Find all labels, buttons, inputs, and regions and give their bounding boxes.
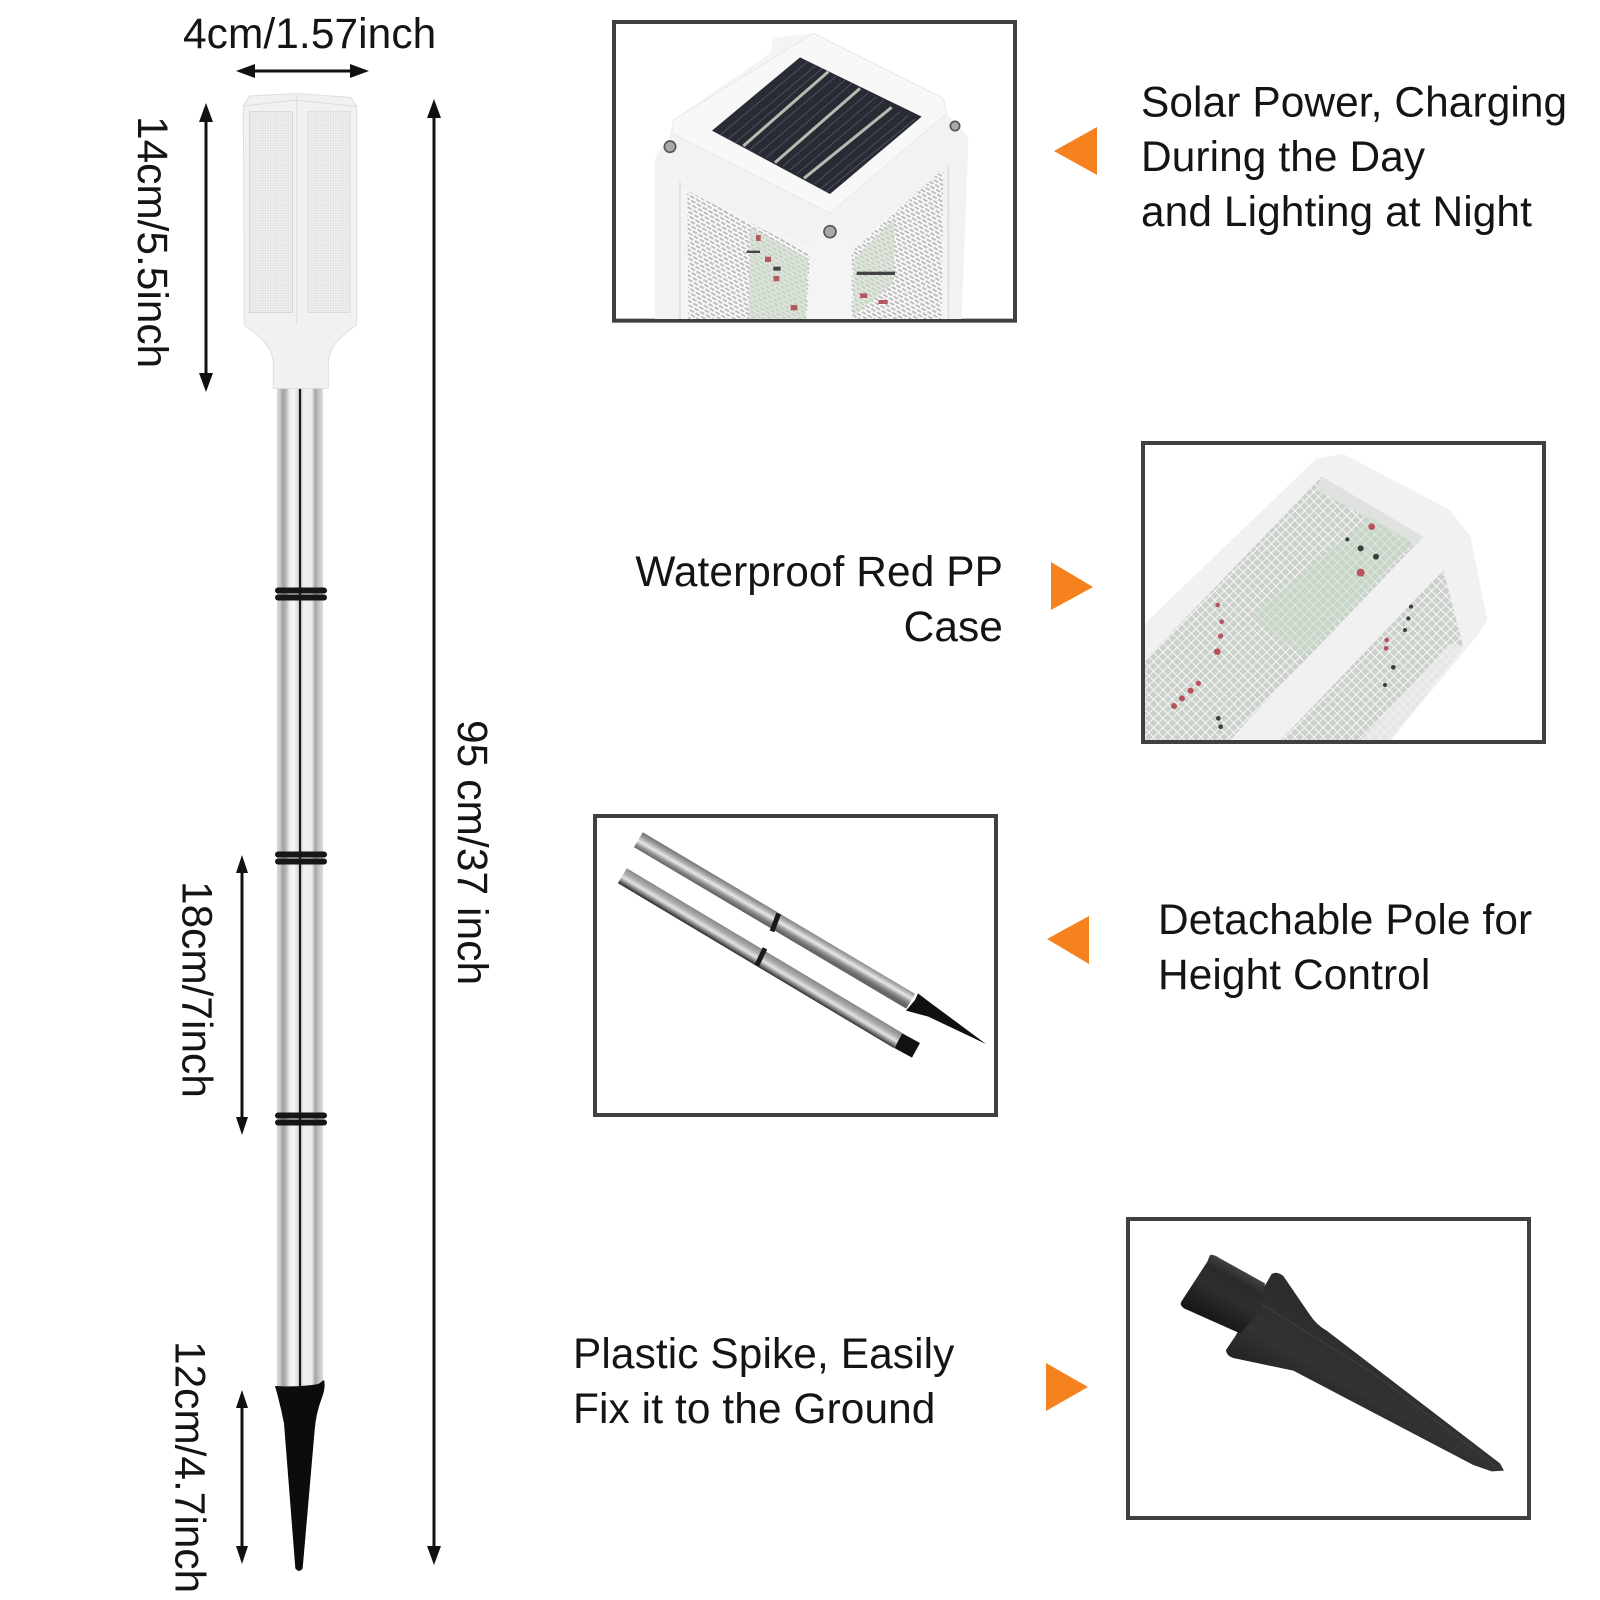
pole joint rings (275, 588, 327, 1126)
dimension: head height: 14cm/5.5inch (129, 116, 176, 368)
arrow: total height (427, 99, 441, 1565)
callout arrow 3 (1047, 916, 1089, 964)
panel: plastic spike photo (1128, 1219, 1529, 1518)
arrow: spike length (236, 1390, 248, 1564)
text: waterproof case (635, 548, 1003, 650)
text: detachable pole (1158, 896, 1532, 998)
panel: case close-up photo (1143, 443, 1544, 742)
dimension: head width (183, 10, 436, 78)
text: waterproof case: Waterproof Red PP (635, 548, 1003, 595)
callout arrow 1 (1054, 127, 1097, 175)
panel: detachable poles photo (595, 816, 996, 1115)
dimension: head height (129, 103, 213, 392)
solar panel (712, 57, 922, 194)
pole (275, 380, 327, 1386)
spike body (1181, 1255, 1504, 1471)
dimension: spike length (166, 1341, 248, 1593)
dimension: head width: 4cm/1.57inch (183, 10, 436, 57)
lantern head (243, 94, 357, 388)
text: detachable pole: Height Control (1158, 951, 1430, 998)
dimension: pole section: 18cm/7inch (174, 881, 220, 1098)
dimension: total height (427, 99, 496, 1565)
callout arrow 2 (1051, 562, 1093, 610)
ground spike (275, 1380, 325, 1571)
text: plastic spike: Fix it to the Ground (573, 1385, 936, 1432)
dimension: pole section (174, 855, 248, 1135)
text: plastic spike (573, 1330, 955, 1432)
text: solar power: Solar Power, Charging (1141, 78, 1567, 126)
screws (664, 121, 960, 238)
dimension: total height: 95 cm/37 inch (449, 720, 496, 985)
lower pole with connector (622, 876, 916, 1050)
panel: solar top photo (614, 22, 1015, 321)
text: waterproof case: Case (904, 603, 1003, 650)
upper pole with spike (638, 840, 986, 1044)
callout arrow 4 (1046, 1363, 1088, 1411)
product: solar stake light (243, 94, 357, 1571)
text: detachable pole: Detachable Pole for (1158, 896, 1532, 943)
arrow: head height (199, 103, 213, 392)
text: solar power (1141, 78, 1567, 235)
arrow: pole section (236, 855, 248, 1135)
arrow: horizontal width (236, 64, 369, 78)
text: solar power: and Lighting at Night (1141, 188, 1532, 235)
text: plastic spike: Plastic Spike, Easily (573, 1330, 955, 1377)
text: solar power: During the Day (1141, 133, 1426, 180)
dimension: spike length: 12cm/4.7inch (166, 1341, 214, 1593)
